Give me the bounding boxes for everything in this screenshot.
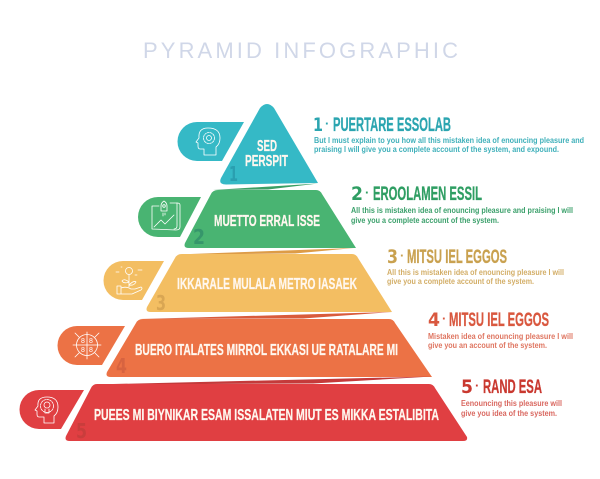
text block 5: 5 (461, 376, 473, 398)
icon: rocket over chart (152, 201, 180, 230)
pyramid level 4: orange: 4 (116, 354, 127, 378)
pyramid level 4: orange (106, 312, 432, 378)
title: PYRAMID INFOGRAPHIC (143, 38, 458, 63)
icon tab 1 (178, 122, 244, 161)
icon tab 2 (138, 197, 201, 237)
icon tab 3 (104, 261, 164, 300)
icon tab 5 (20, 390, 84, 429)
text block 2: 2 (351, 183, 363, 205)
icon: target: 8 (81, 347, 85, 354)
icon: target (73, 332, 101, 359)
text block 4: give you an account of the system. (428, 340, 547, 350)
text block 3: MITSU IEL EGGOS (407, 246, 507, 268)
text block 4 (428, 309, 573, 350)
pyramid level 3: yellow (146, 248, 392, 315)
pyramid level 2: green: 2 (193, 225, 205, 249)
text block 4: Mistaken idea of enouncing pleasure I will (428, 331, 573, 341)
text block 2: give you a complete account of the system. (351, 215, 499, 225)
icon tab 4 (58, 326, 125, 365)
icon: head with gear (196, 128, 220, 155)
text block 2: EROOLAMEN ESSIL (373, 183, 482, 205)
text block 3 (387, 246, 564, 286)
pyramid level 1: teal (220, 104, 318, 186)
pyramid level 3: yellow: IKKARALE MULALA METRO IASAEK (177, 276, 357, 293)
text block 5 (461, 376, 562, 418)
text block 4: · (442, 311, 446, 326)
pyramid level 1: teal: PERSPIT (245, 153, 288, 170)
pyramid level 5: red: 5 (76, 419, 87, 443)
text block 1: PUERTARE ESSOLAB (333, 114, 451, 136)
text block 3: give you a complete account of the system. (387, 276, 534, 286)
pyramid level 3: yellow: 3 (156, 291, 166, 315)
icon: target: 8 (81, 338, 85, 345)
icon: target: 8 (89, 347, 93, 354)
text block 3: 3 (387, 246, 398, 268)
pyramid level 2: green (184, 184, 356, 249)
text block 4: 4 (428, 309, 440, 331)
pyramid level 1: teal: 1 (229, 162, 238, 186)
icon: head with bulb (35, 397, 58, 423)
text block 1 (313, 114, 584, 154)
text block 5: give you idea of the system. (461, 408, 557, 418)
text block 3: · (400, 248, 404, 263)
pyramid level 1: teal: SED (257, 138, 277, 155)
pyramid level 5: red (66, 376, 467, 443)
text block 3: All this is mistaken idea of enouncing pleasure I will (387, 267, 564, 277)
text block 1: 1 (313, 114, 323, 136)
text block 1: · (325, 116, 329, 131)
icon: target: 8 (89, 338, 93, 345)
pyramid level 2: green: MUETTO ERRAL ISSE (214, 213, 320, 230)
text block 5: · (475, 378, 479, 393)
text block 5: Eenouncing this pleasure will (461, 398, 562, 408)
text block 5: RAND ESA (483, 376, 542, 398)
pyramid level 4: orange: BUERO ITALATES MIRROL EKKASI UE RATALARE MI (135, 342, 398, 359)
text block 2: · (365, 185, 369, 200)
text block 2 (351, 183, 573, 225)
text block 1: praising I will give you a complete account of the system, and expound. (314, 144, 559, 154)
icon: plant in hand (116, 267, 142, 294)
